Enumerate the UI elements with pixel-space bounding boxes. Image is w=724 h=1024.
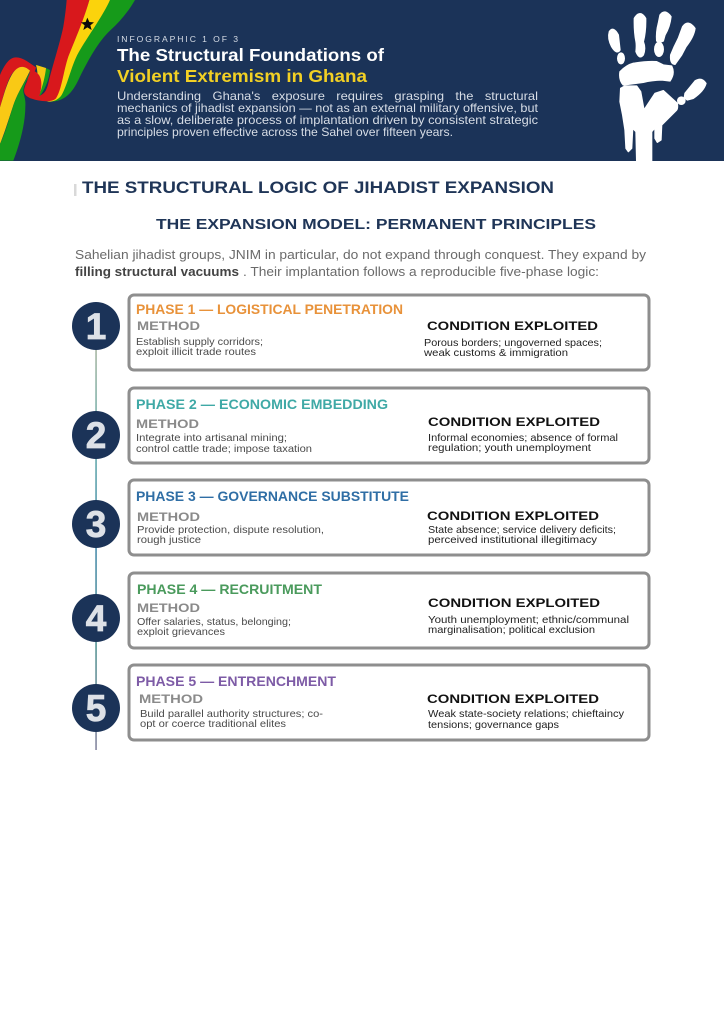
panel: phase 2: regulation; youth unemployment bbox=[428, 443, 591, 454]
title bbox=[117, 45, 384, 86]
panel: phase 2: Integrate into artisanal mining; bbox=[136, 433, 287, 444]
panel: phase 5: CONDITION EXPLOITED bbox=[427, 694, 599, 706]
panel: phase 1: weak customs & immigration bbox=[423, 348, 568, 359]
panel: phase 5: opt or coerce traditional elites bbox=[140, 719, 286, 730]
panel: phase 5: tensions; governance gaps bbox=[428, 720, 559, 731]
section heading: THE STRUCTURAL LOGIC OF JIHADIST EXPANSION bbox=[82, 178, 554, 197]
panel: phase 5: PHASE 5 — ENTRENCHMENT bbox=[136, 673, 336, 689]
icon: white hand print bbox=[609, 12, 706, 161]
intro paragraph bbox=[75, 247, 647, 279]
phase 5 number: 5 bbox=[86, 688, 106, 729]
phase 4 number bbox=[72, 594, 120, 642]
panel: phase 2 bbox=[129, 388, 649, 463]
panel: phase 1 bbox=[129, 295, 649, 370]
intro paragraph: . Their implantation follows a reproducible five-phase logic: bbox=[243, 264, 599, 279]
phase 1 number: 1 bbox=[86, 306, 106, 347]
panel: phase 3: State absence; service delivery deficits; bbox=[428, 525, 616, 536]
panel: phase 1: METHOD bbox=[137, 321, 200, 333]
panel: phase 3: PHASE 3 — GOVERNANCE SUBSTITUTE bbox=[136, 488, 409, 504]
panel: phase 3: rough justice bbox=[137, 535, 201, 546]
panel: phase 1: Establish supply corridors; bbox=[136, 337, 263, 348]
panel: phase 1: CONDITION EXPLOITED bbox=[427, 321, 598, 333]
phase 2 number bbox=[72, 411, 120, 459]
timeline line bbox=[95, 340, 97, 750]
panel: phase 3: Provide protection, dispute resolution, bbox=[137, 525, 324, 536]
intro text: principles proven effective across the Sahel over fifteen years. bbox=[117, 126, 453, 139]
panel: phase 4: marginalisation; political exclusion bbox=[428, 625, 595, 636]
panel: phase 5: Weak state-society relations; chieftaincy bbox=[428, 709, 625, 720]
title: The Structural Foundations of bbox=[117, 45, 384, 65]
panel: phase 4: exploit grievances bbox=[137, 627, 225, 638]
panel: phase 5 bbox=[129, 665, 649, 740]
subheading: THE EXPANSION MODEL: PERMANENT PRINCIPLES bbox=[156, 217, 596, 233]
panel: phase 2: PHASE 2 — ECONOMIC EMBEDDING bbox=[136, 396, 388, 412]
intro text: mechanics of jihadist expansion — not as an external military offensive, but bbox=[117, 102, 539, 115]
intro text bbox=[117, 90, 539, 139]
panel: phase 5: Build parallel authority structures; co- bbox=[140, 709, 323, 720]
panel: phase 4: PHASE 4 — RECRUITMENT bbox=[137, 581, 322, 597]
intro text: Understanding Ghana's exposure requires grasping the structural bbox=[117, 90, 538, 103]
header banner bbox=[0, 0, 724, 161]
eyebrow label: INFOGRAPHIC 1 OF 3 bbox=[117, 34, 238, 44]
intro paragraph: filling structural vacuums bbox=[75, 264, 239, 279]
panel: phase 5: METHOD bbox=[139, 694, 203, 706]
phase 1 number bbox=[72, 302, 120, 350]
panel: phase 1: PHASE 1 — LOGISTICAL PENETRATION bbox=[136, 301, 403, 317]
panel: phase 3: METHOD bbox=[137, 512, 200, 524]
panel: phase 4: Youth unemployment; ethnic/communal bbox=[428, 615, 629, 626]
phase 5 number bbox=[72, 684, 120, 732]
phase 3 number bbox=[72, 500, 120, 548]
panel: phase 3: CONDITION EXPLOITED bbox=[427, 511, 599, 523]
intro paragraph: Sahelian jihadist groups, JNIM in particular, do not expand through conquest. They expand by bbox=[75, 247, 647, 262]
panel: phase 2: CONDITION EXPLOITED bbox=[428, 417, 600, 429]
phase 3 number: 3 bbox=[86, 504, 106, 545]
panel: phase 2: METHOD bbox=[136, 419, 199, 431]
panel: phase 1: exploit illicit trade routes bbox=[136, 347, 256, 358]
panel: phase 1: Porous borders; ungoverned spaces; bbox=[424, 338, 602, 349]
panel: phase 3 bbox=[129, 480, 649, 555]
icon: Ghana flag ribbon bbox=[0, 0, 135, 161]
panel: phase 2: Informal economies; absence of formal bbox=[428, 433, 618, 444]
panel: phase 4: CONDITION EXPLOITED bbox=[428, 598, 600, 610]
panel: phase 2: control cattle trade; impose taxation bbox=[136, 444, 312, 455]
phase 4 number: 4 bbox=[86, 598, 107, 639]
title: Violent Extremism in Ghana bbox=[117, 66, 367, 86]
panel: phase 3: perceived institutional illegitimacy bbox=[428, 535, 598, 546]
intro text: as a slow, deliberate process of implantation driven by consistent strategic bbox=[117, 114, 538, 127]
phase 2 number: 2 bbox=[86, 415, 106, 456]
panel: phase 4 bbox=[129, 573, 649, 648]
panel: phase 4: Offer salaries, status, belonging; bbox=[137, 617, 291, 628]
panel: phase 4: METHOD bbox=[137, 603, 200, 615]
